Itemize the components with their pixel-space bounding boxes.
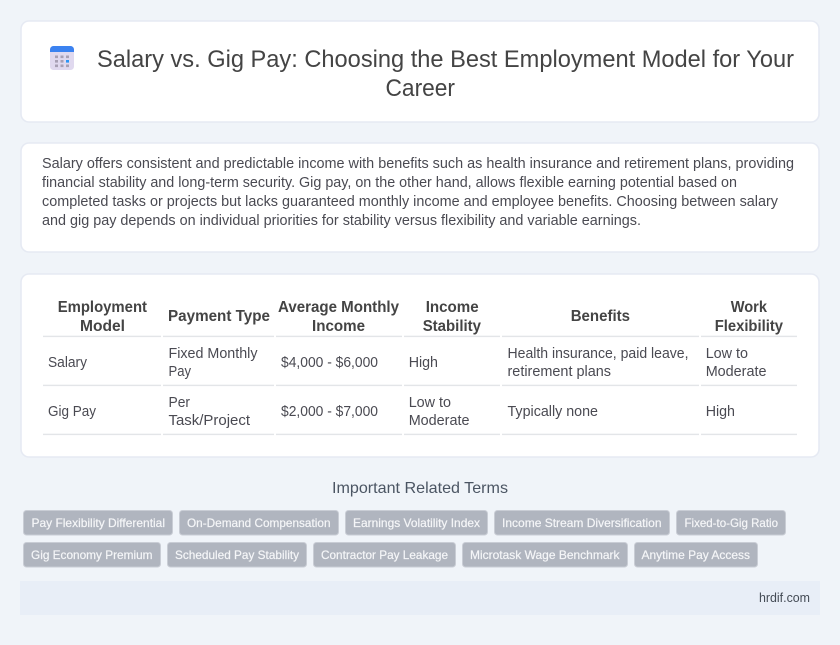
table row: salary [43, 346, 797, 386]
panel: related term tags: Income Stream Diversification [502, 516, 662, 530]
table row: salary: Fixed Monthly [168, 346, 258, 362]
panel: related term tags: Microtask Wage Benchmark [470, 548, 620, 562]
table row: gig pay: Typically none [508, 404, 598, 420]
panel: introduction paragraph: financial stability and long-term security. Gig pay, on the other hand, allows flexible earning potential based on [42, 175, 737, 191]
table row: gig pay: Task/Project [168, 413, 250, 429]
table row: gig pay: Moderate [409, 413, 470, 429]
table header row: Model [80, 318, 125, 335]
heading: important related terms: Important Related Terms [332, 480, 508, 497]
table header row: Work [731, 299, 767, 316]
table header row: Employment [58, 299, 148, 316]
table header row: Benefits [571, 308, 630, 325]
table row: salary: Pay [168, 364, 192, 380]
table header row: Income [426, 299, 479, 316]
table row: gig pay: High [706, 404, 735, 420]
table header row: Income [312, 318, 365, 335]
table row: salary: Health insurance, paid leave, [508, 346, 688, 362]
title text: Career [386, 75, 455, 102]
table row: salary: Moderate [706, 364, 766, 380]
table header row: Average Monthly [278, 299, 399, 316]
panel: introduction paragraph: and gig pay depends on individual priorities for stability versus flexibility and variable earnings. [42, 213, 641, 229]
table row: salary: Salary [48, 355, 88, 371]
table row: gig pay: Per [168, 395, 190, 411]
table row: salary: $4,000 - $6,000 [281, 355, 378, 371]
table header row: Payment Type [168, 308, 270, 325]
table row: gig pay [43, 395, 797, 435]
panel: related term tags: Scheduled Pay Stability [175, 548, 299, 562]
panel: related term tags: Pay Flexibility Differential [32, 516, 165, 530]
title text [97, 46, 794, 102]
panel: related term tags: Contractor Pay Leakage [321, 548, 448, 562]
panel: related term tags: Earnings Volatility Index [353, 516, 480, 530]
table header row: Stability [423, 318, 481, 335]
table row: salary: retirement plans [508, 364, 611, 380]
panel: related term tags: On-Demand Compensation [187, 516, 330, 530]
panel: introduction paragraph [21, 143, 819, 252]
panel: related term tags: Fixed-to-Gig Ratio [684, 516, 778, 530]
panel: related term tags: Gig Economy Premium [31, 548, 152, 562]
table row: gig pay: $2,000 - $7,000 [281, 404, 378, 420]
panel: introduction paragraph: completed tasks or projects but lacks guaranteed monthly income and employee benefits. Choosing between salary [42, 194, 779, 210]
table row: gig pay: Low to [409, 395, 451, 411]
table row: salary: Low to [706, 346, 748, 362]
footer: hrdif.com [759, 590, 810, 605]
panel: related term tags [24, 510, 786, 567]
icon: calendar [50, 46, 74, 70]
table row: salary: High [409, 355, 438, 371]
panel: introduction paragraph: Salary offers consistent and predictable income with benefits such as health insurance and retirement plans, providing [42, 156, 794, 172]
title text: Salary vs. Gig Pay: Choosing the Best Employment Model for Your [97, 46, 794, 73]
panel: title header [21, 21, 819, 122]
footer [20, 581, 820, 615]
table row: gig pay: Gig Pay [48, 404, 97, 420]
table header row: Flexibility [715, 318, 783, 335]
panel: related term tags: Anytime Pay Access [642, 548, 750, 562]
table header row [43, 299, 797, 337]
panel: comparison table [21, 274, 819, 457]
